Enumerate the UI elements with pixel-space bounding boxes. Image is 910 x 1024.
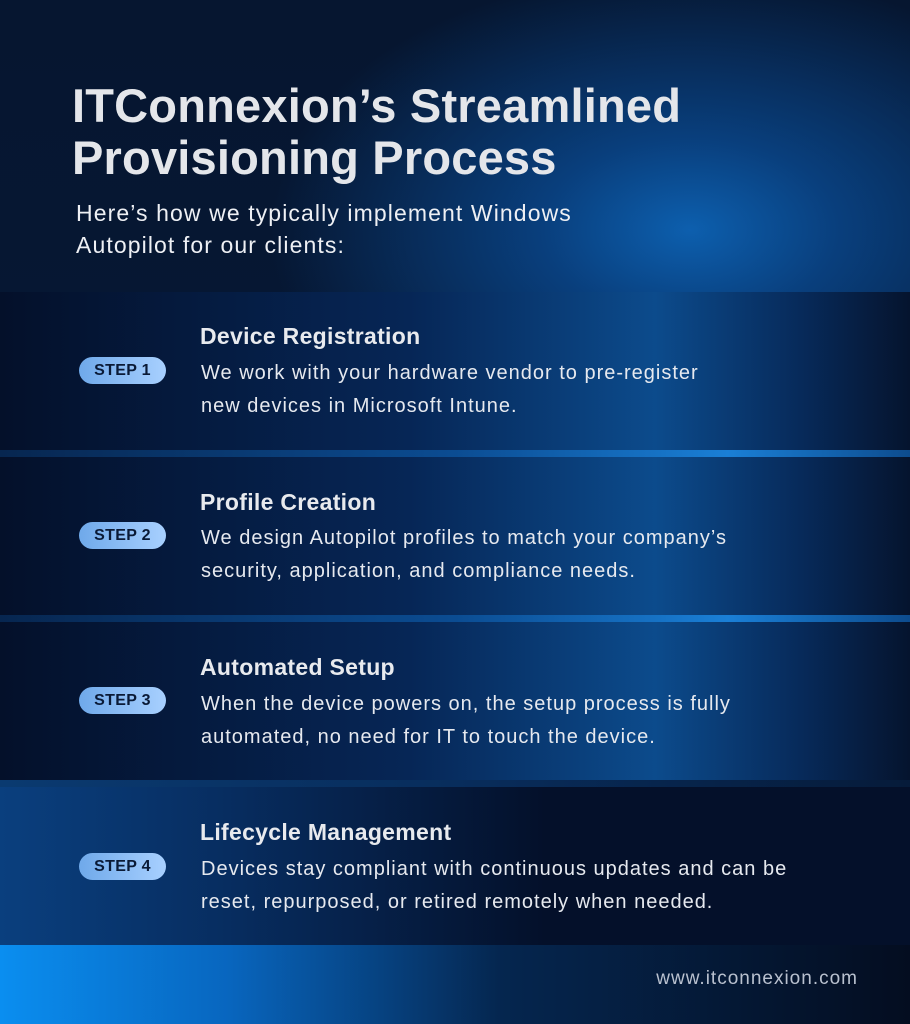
step 3 badge: STEP 3 xyxy=(94,692,151,709)
website url: www.itconnexion.com xyxy=(656,968,858,989)
step 4 text xyxy=(201,858,787,913)
step 3 text: automated, no need for IT to touch the device. xyxy=(201,726,656,748)
panel: step 1 xyxy=(0,292,910,450)
step 4 text: reset, repurposed, or retired remotely when needed. xyxy=(201,891,713,913)
step 2 badge: STEP 2 xyxy=(94,527,151,544)
step 4 badge: STEP 4 xyxy=(94,858,151,875)
subtitle xyxy=(76,200,572,258)
step 3 badge xyxy=(79,687,166,714)
step 1 badge xyxy=(79,357,166,384)
step 4 badge xyxy=(79,853,166,880)
subtitle: Here’s how we typically implement Windows xyxy=(76,200,572,226)
step 2 text: We design Autopilot profiles to match your company’s xyxy=(201,527,727,549)
step 4 text: Devices stay compliant with continuous updates and can be xyxy=(201,858,787,880)
title: Provisioning Process xyxy=(72,131,557,184)
step 1 heading: Device Registration xyxy=(200,323,420,349)
step 1 text xyxy=(201,362,699,417)
step 1 text: new devices in Microsoft Intune. xyxy=(201,395,518,417)
panel: step 4 xyxy=(0,787,910,945)
title: ITConnexion’s Streamlined xyxy=(72,79,681,132)
step 4 heading: Lifecycle Management xyxy=(200,819,451,845)
step 2 text xyxy=(201,527,727,582)
step 3 heading: Automated Setup xyxy=(200,654,395,680)
step 1 text: We work with your hardware vendor to pre-register xyxy=(201,362,699,384)
footer xyxy=(0,945,910,1024)
title xyxy=(72,79,681,184)
step 2 badge xyxy=(79,522,166,549)
panel: step 3 xyxy=(0,622,910,780)
panel: step 2 xyxy=(0,457,910,615)
step 2 text: security, application, and compliance needs. xyxy=(201,560,636,582)
step 1 badge: STEP 1 xyxy=(94,362,151,379)
step 2 heading: Profile Creation xyxy=(200,489,376,515)
step 3 text: When the device powers on, the setup process is fully xyxy=(201,693,731,715)
step 3 text xyxy=(201,693,731,748)
subtitle: Autopilot for our clients: xyxy=(76,232,345,258)
